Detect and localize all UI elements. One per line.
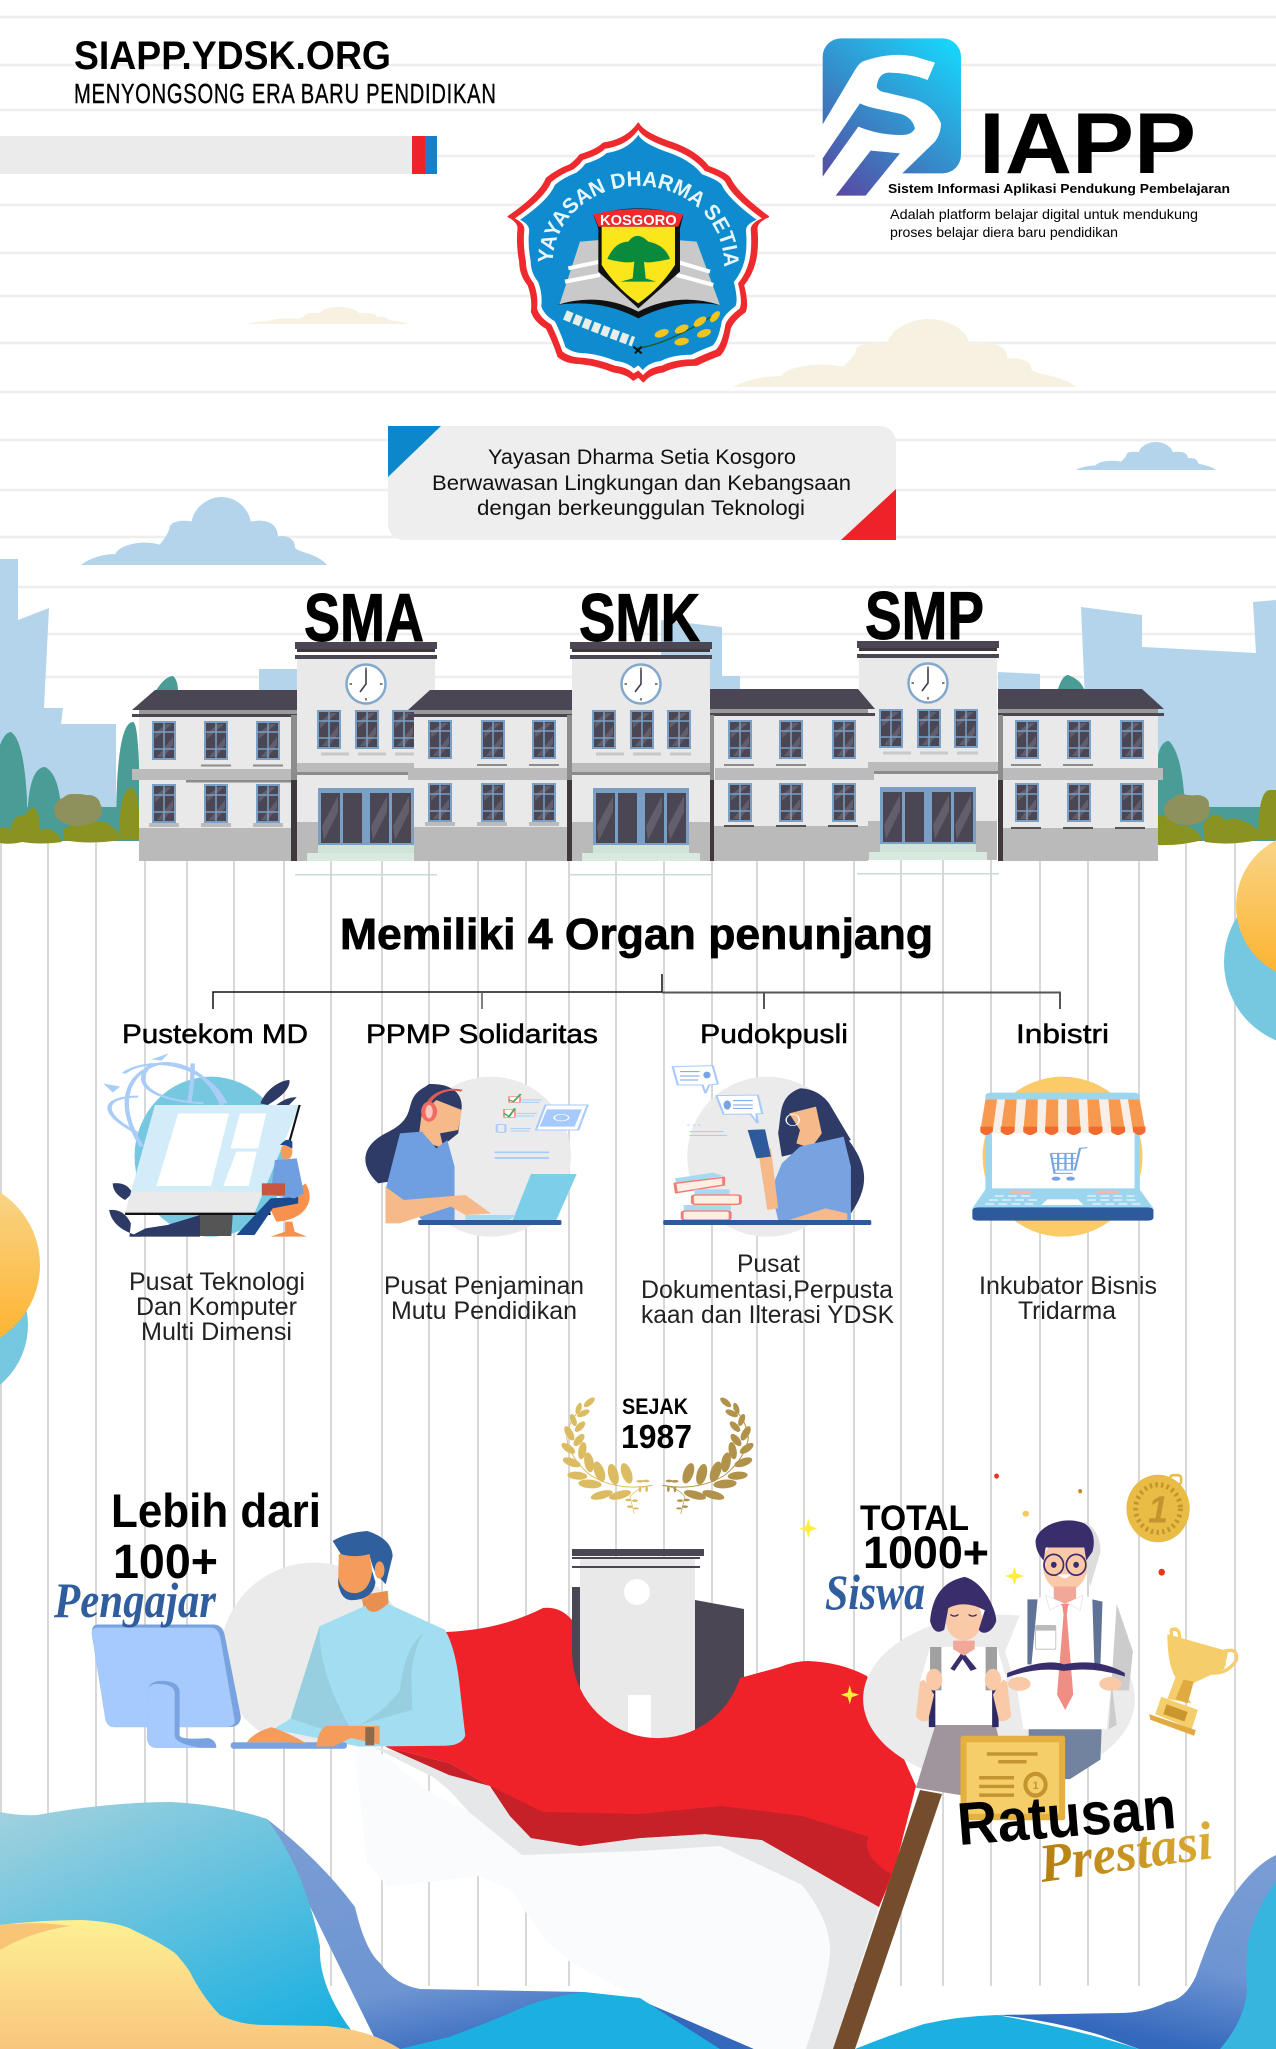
illustration: woman on laptop (365, 1077, 588, 1237)
trophy (1149, 1629, 1237, 1736)
flag: white band (355, 1747, 879, 2049)
heading: 4 supporting organs: Memiliki 4 Organ penunjang (340, 910, 933, 959)
organ 1: Pustekom MD (103, 1019, 310, 1346)
school building: wing 3 (710, 689, 875, 861)
sparkles and dots (799, 1473, 1165, 1704)
organ 2: PPMP Solidaritas (365, 1019, 598, 1325)
grey banner bar with red and blue end (0, 136, 437, 174)
background: horizontal ruled lines (0, 17, 1276, 677)
trees and bushes (0, 675, 1276, 845)
organ description: Tridarma (1018, 1297, 1116, 1325)
cloud: left blue (81, 497, 327, 565)
organ title: Pudokpusli (700, 1019, 848, 1049)
organ 4: Inbistri (972, 1019, 1157, 1325)
school building: wing 1 (132, 690, 297, 861)
motto text: dengan berkeunggulan Teknologi (477, 497, 805, 520)
flag: red band (386, 1608, 916, 1907)
laurel wreath right (662, 1396, 755, 1514)
label: SMA: SMA (304, 580, 424, 656)
motto text (432, 446, 851, 520)
bottom wave: left blue (0, 1802, 754, 2049)
school building: towers (295, 641, 999, 876)
stat: teachers: Pengajar (53, 1572, 216, 1628)
organ description: Pusat Teknologi (129, 1268, 305, 1296)
stat: students: Siswa (825, 1564, 925, 1620)
boy student (1005, 1520, 1133, 1779)
since label: SEJAK (622, 1394, 688, 1419)
medal: 1 (1148, 1488, 1168, 1531)
motto text: Yayasan Dharma Setia Kosgoro (488, 446, 796, 469)
girl student (916, 1577, 1011, 1795)
organ description: Dokumentasi,Perpusta (641, 1276, 893, 1304)
blue corner triangle (388, 426, 441, 477)
organ description: Pusat Penjaminan (384, 1272, 584, 1300)
organ 3: Pudokpusli (641, 1019, 894, 1329)
organ description: Pusat (737, 1250, 800, 1278)
platform description: Adalah platform belajar digital untuk mendukung (890, 206, 1198, 222)
certificate: 1 (1033, 1780, 1038, 1792)
emblem: Yayasan Dharma Setia Kosgoro: KOSGORO (600, 213, 677, 229)
stat: teachers (53, 1484, 321, 1628)
organ title: Pustekom MD (122, 1019, 308, 1049)
illustration: computer and worker (103, 1053, 310, 1237)
callout: foundation motto (388, 426, 896, 540)
site title: SIAPP.YDSK.ORG (74, 34, 391, 78)
illustration: woman with books (663, 1066, 871, 1237)
stat: teachers: 100+ (113, 1536, 218, 1589)
right decorative circles (1224, 832, 1276, 1047)
organ title: Inbistri (1016, 1019, 1109, 1049)
organ title: PPMP Solidaritas (366, 1019, 598, 1049)
school building: wing 2 (408, 690, 572, 861)
school building: wing 4 (998, 689, 1164, 861)
stat: teachers: Lebih dari (111, 1484, 321, 1537)
bottom wave: right blue (855, 1855, 1276, 2049)
icon: S mark (815, 38, 961, 200)
laurel wreath left (560, 1396, 653, 1514)
motto text: Berwawasan Lingkungan dan Kebangsaan (432, 472, 851, 495)
logo subtitle: Sistem Informasi Aplikasi Pendukung Pembelajaran (888, 181, 1230, 196)
stat: achievements (955, 1774, 1216, 1894)
flag pole (833, 1790, 942, 2049)
label: SMK: SMK (579, 580, 700, 656)
organ description (641, 1250, 894, 1329)
platform description: proses belajar diera baru pendidikan (890, 224, 1118, 240)
organ description: Multi Dimensi (141, 1318, 292, 1346)
background: vertical ruled lines (1, 843, 1235, 1986)
stat: students: TOTAL (860, 1499, 969, 1538)
label: SMP: SMP (865, 578, 984, 654)
city skyline (0, 559, 1276, 810)
cloud: right blue (1076, 442, 1216, 470)
stat: students: 1000+ (863, 1527, 989, 1578)
students illustration (799, 1473, 1237, 1820)
medal (1126, 1475, 1190, 1542)
red corner triangle (841, 489, 896, 540)
platform description (890, 206, 1198, 240)
illustration: online store laptop (972, 1077, 1153, 1237)
organ description: Dan Komputer (136, 1293, 297, 1321)
logo: SIAPP (815, 38, 1230, 200)
organ description (129, 1268, 305, 1346)
stat: students (825, 1499, 989, 1620)
year: 1987 (621, 1418, 692, 1455)
organ description: Mutu Pendidikan (391, 1297, 577, 1325)
stat: achievements: Prestasi (1034, 1810, 1216, 1894)
grey backdrop (863, 1615, 1135, 1783)
stat: achievements: Ratusan (955, 1774, 1178, 1858)
cloud: small beige (247, 307, 409, 324)
emblem: Yayasan Dharma Setia Kosgoro: YAYASAN DHARMA SETIA (538, 171, 739, 267)
logo wordmark: IAPP (979, 96, 1196, 192)
tagline: MENYONGSONG ERA BARU PENDIDIKAN (74, 79, 496, 110)
badge: since 1987 (560, 1394, 755, 1514)
emblem: Yayasan Dharma Setia Kosgoro (508, 122, 770, 382)
icon: school tower silhouette (572, 1549, 744, 1744)
org tree connector (213, 974, 1060, 1009)
certificate (960, 1736, 1065, 1820)
left decorative circles (0, 1179, 40, 1403)
organ description: kaan dan Ilterasi YDSK (641, 1301, 894, 1329)
person: teacher at computer (92, 1531, 465, 1749)
cloud: large beige (733, 319, 1076, 387)
organ description (979, 1272, 1157, 1325)
organ description: Inkubator Bisnis (979, 1272, 1157, 1300)
organ description (384, 1272, 584, 1325)
